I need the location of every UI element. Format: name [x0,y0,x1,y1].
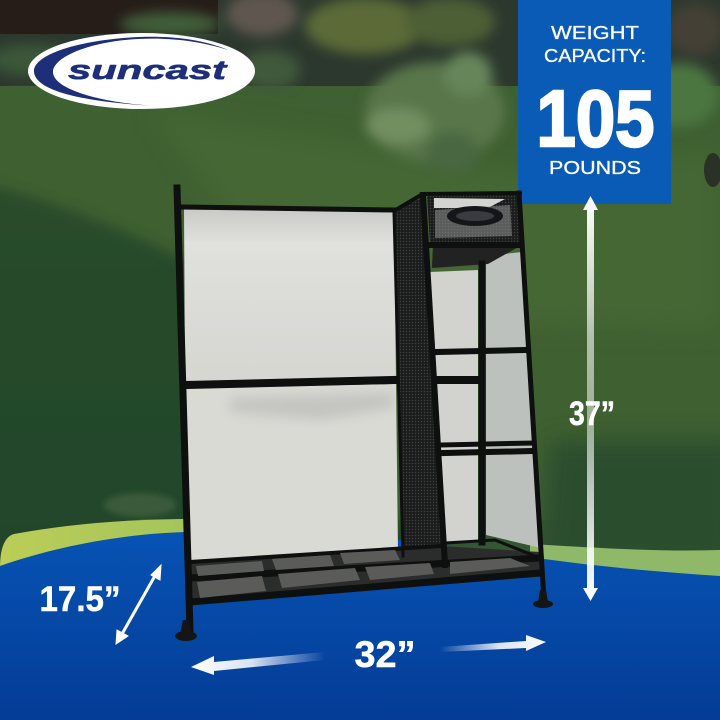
back mesh panel lower [186,384,398,566]
back mesh panel upper [184,208,396,384]
foliage plant [365,52,505,172]
hedge and garden beds [0,0,720,90]
bottom shelf base [190,546,540,602]
badge number: 105 [536,74,654,163]
weight capacity badge: CAPACITY: [544,45,646,66]
depth label: 17.5” [40,580,120,619]
logo: suncast oval [28,33,255,109]
frame [177,188,544,632]
depth arrow [116,565,161,644]
blue ground [0,532,720,720]
feet [175,590,553,641]
green band right [530,544,720,580]
top bin [427,194,522,268]
height arrow [583,196,598,601]
logo wordmark: suncast [68,55,228,85]
product: black mesh storage rack [175,188,553,641]
lawn bands [0,86,720,520]
bottom shelf mesh [196,550,530,598]
side mesh panel [394,198,442,556]
right compartment panels [430,270,478,542]
floor swoosh: green band and blue ground [0,519,720,720]
badge label: WEIGHT [551,22,639,43]
width arrow right [440,635,546,652]
badge unit: POUNDS [549,158,641,178]
green band left [0,519,200,575]
width arrow left [191,652,325,675]
height label: 37” [569,395,615,433]
width label: 32” [354,634,416,675]
weight capacity badge [518,0,671,204]
